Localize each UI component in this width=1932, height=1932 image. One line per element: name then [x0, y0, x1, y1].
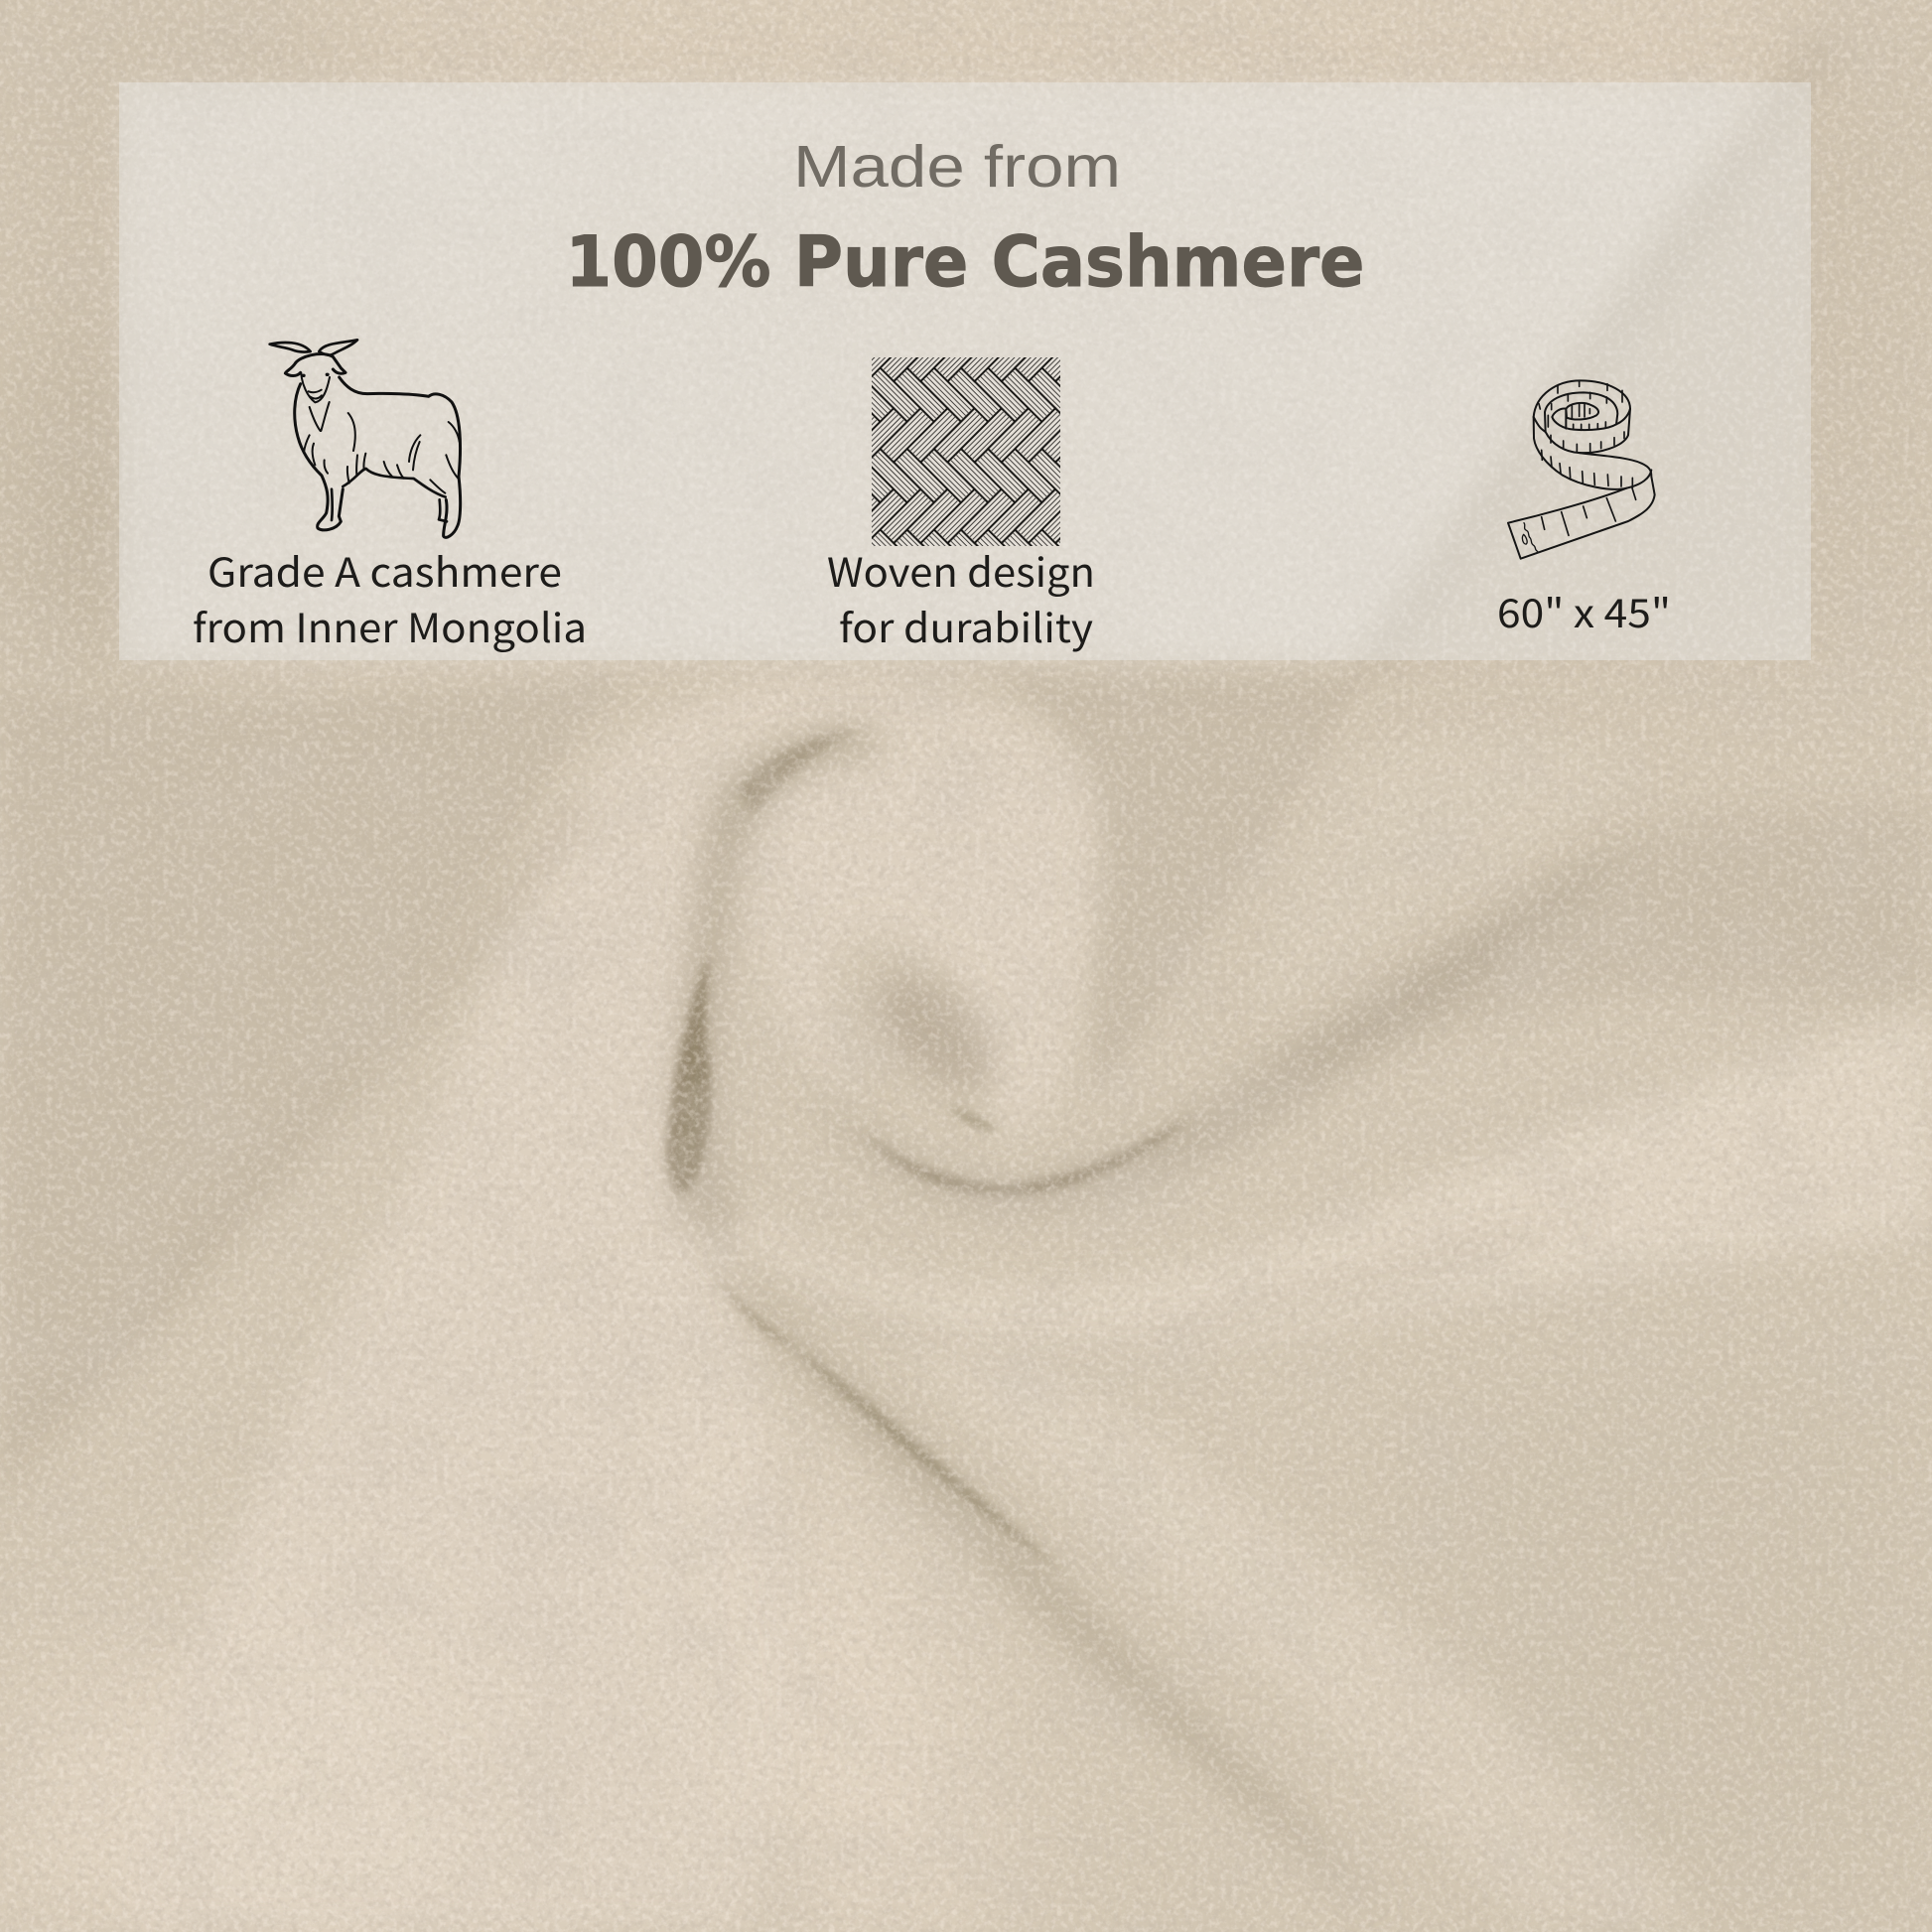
- label: Woven design for durability: [827, 541, 1095, 654]
- label: Woven design for durability: Woven design: [827, 541, 1095, 599]
- label: Grade A cashmere from Inner Mongolia: [193, 541, 587, 654]
- label: dimensions: 60" x 45": [1497, 582, 1671, 639]
- label: Woven design for durability: for durability: [839, 597, 1093, 654]
- fabric: darker cloth left of the big fold: [8, 699, 573, 1442]
- icon: woven basket pattern: [872, 357, 1060, 546]
- panel: translucent header panel: [119, 82, 1811, 660]
- fabric: light area under the panel, left of the diagonal: [123, 86, 1762, 659]
- icon: goat: [270, 340, 461, 537]
- label: Grade A cashmere from Inner Mongolia: from Inner Mongolia: [193, 597, 587, 654]
- icon: measuring tape: [1508, 380, 1655, 559]
- fabric: sharp dark creases: [666, 730, 1191, 1571]
- heading: 100% Pure Cashmere: 100% Pure Cashmere: [566, 221, 1364, 303]
- heading: Made from: Made from: [793, 134, 1121, 200]
- fabric: diagonal fold edge: [1355, 25, 1842, 671]
- label: Grade A cashmere from Inner Mongolia: Grade A cashmere: [207, 541, 562, 599]
- fabric: darker cloth right of the swirl: [1036, 683, 1345, 1062]
- fabric: fold highlights: [123, 677, 1932, 1932]
- fabric: soft crease shadows: [251, 717, 1571, 1863]
